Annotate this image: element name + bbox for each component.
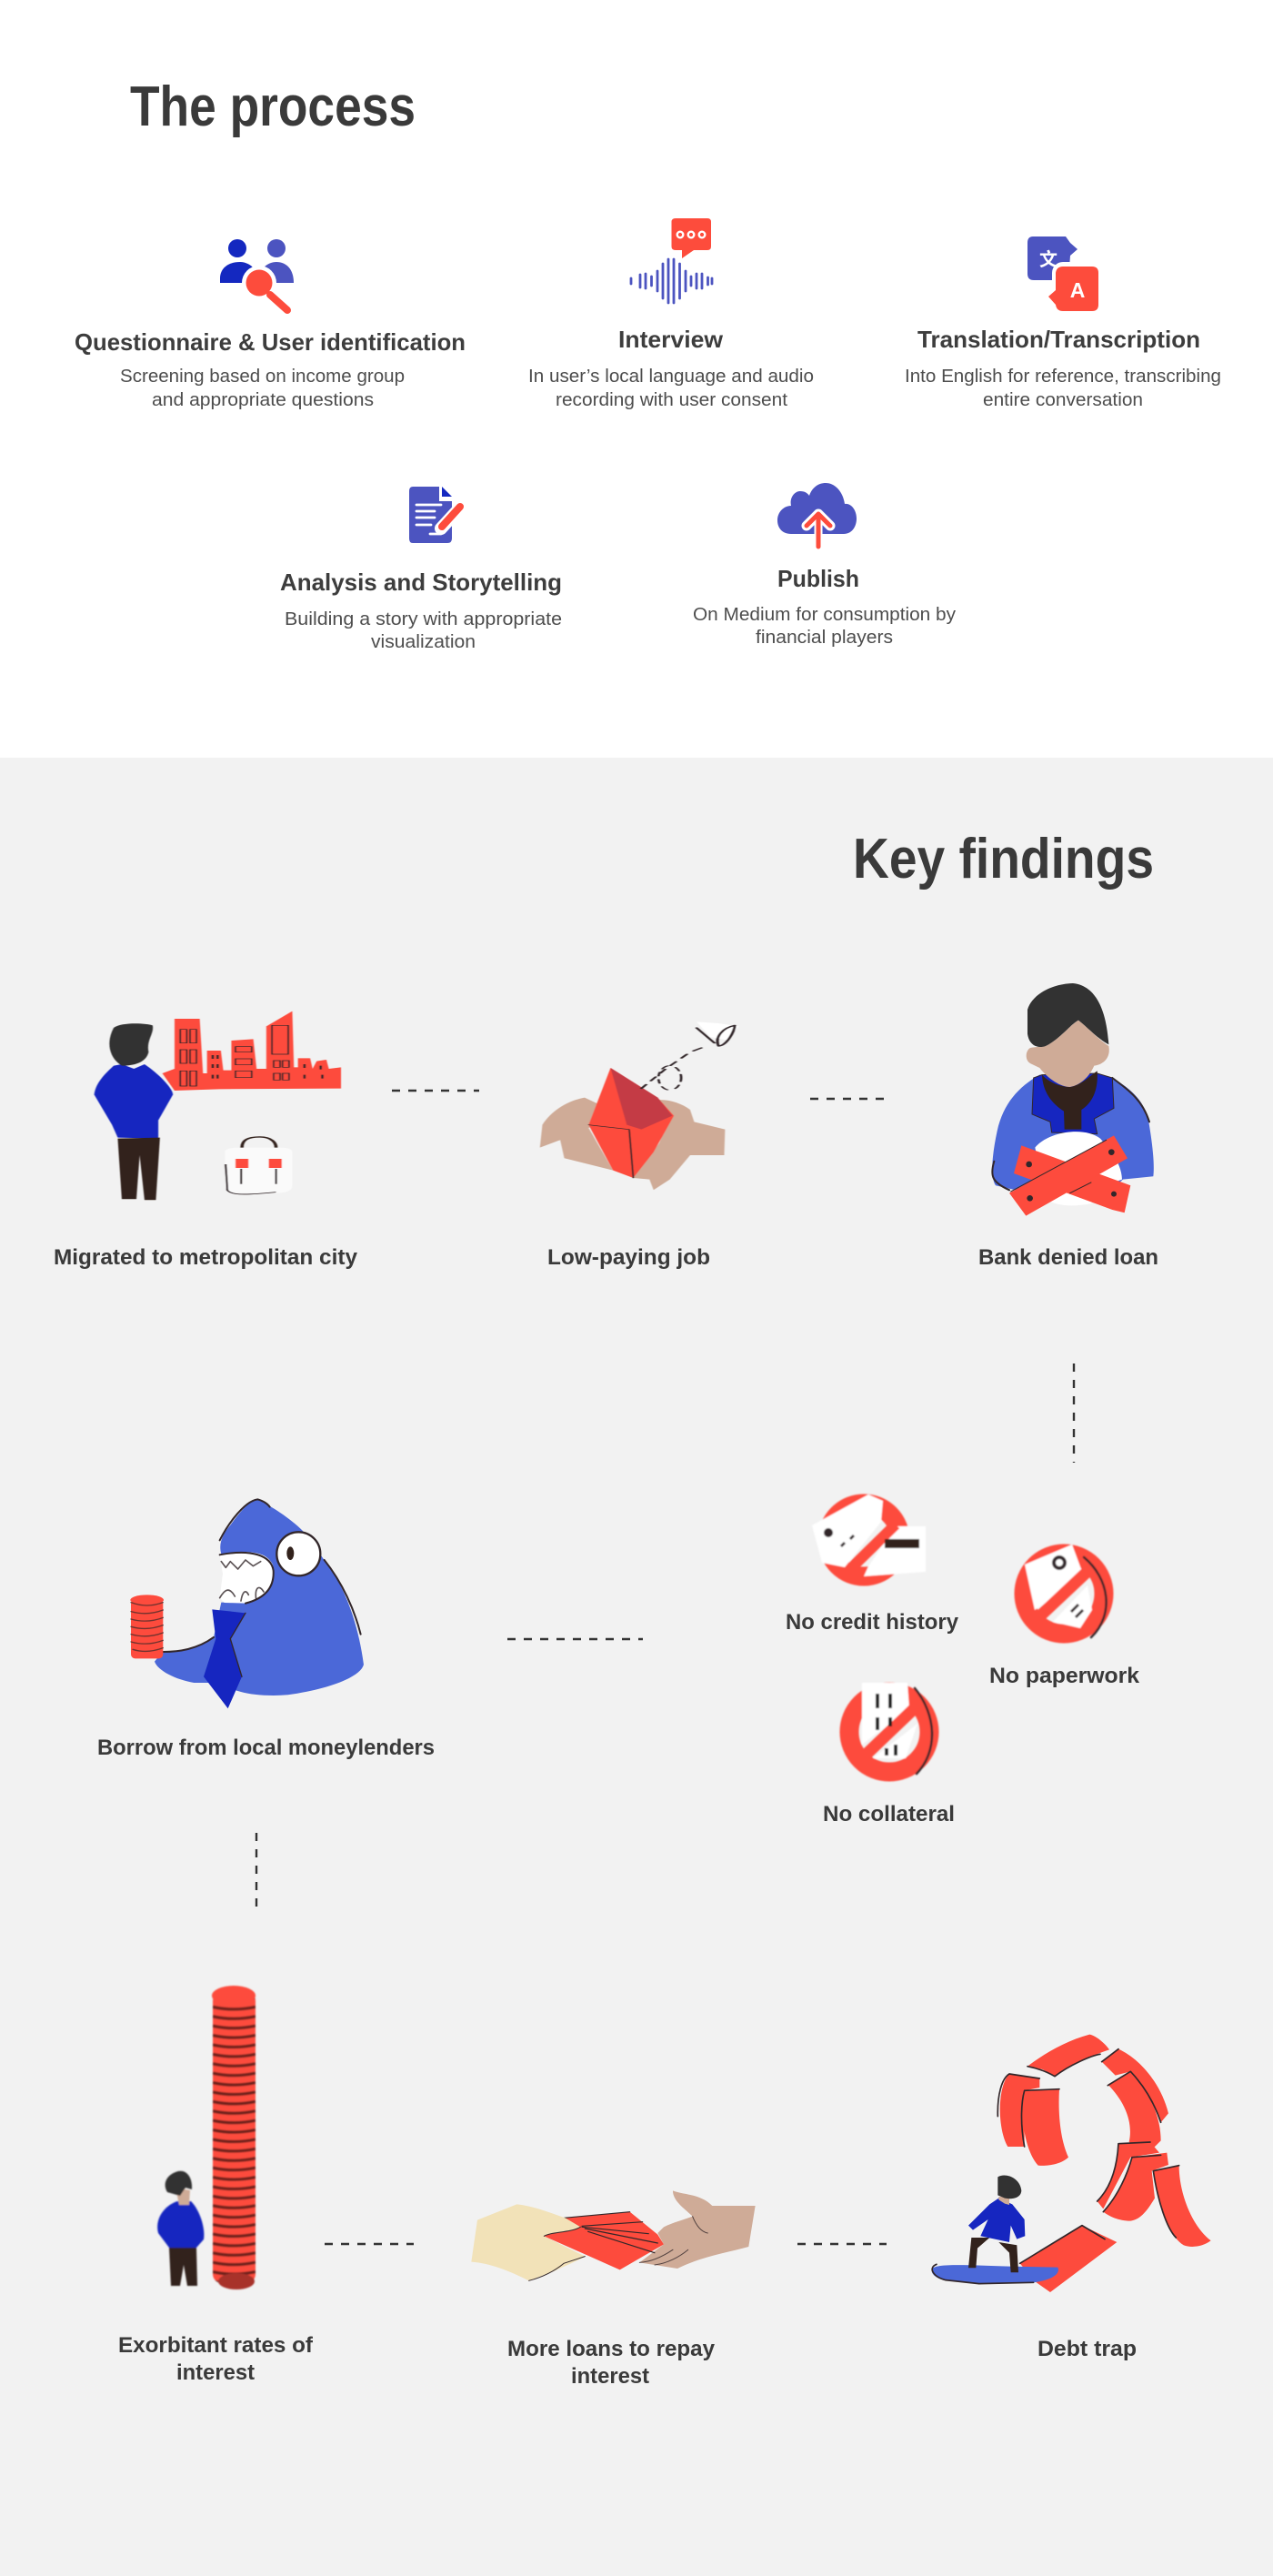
icon: speech bubble and waveform [631,218,712,303]
connector: more loans to debt trap [797,2243,887,2245]
neck [1042,1071,1098,1130]
connector: interest to more loans [325,2243,414,2245]
person [95,1023,173,1200]
heading: Translation/Transcription [917,326,1200,353]
illustration: tall coin stack and small person [157,1986,256,2289]
icon: cloud upload [777,483,857,547]
surfer [968,2175,1025,2272]
description [120,367,405,410]
icon: users with magnifier [220,239,294,310]
description: entire conversation [983,390,1143,410]
paper [588,1068,674,1178]
heading: Interview [618,326,724,353]
description: financial players [756,628,893,648]
left hand [540,1098,613,1171]
description [693,605,956,648]
shirt [1035,1132,1122,1205]
description: In user’s local language and audio [528,367,814,387]
label: more loans to repay interest: interest [571,2364,649,2389]
label: more loans to repay interest [507,2337,716,2389]
icon: translation bubbles: 文 [1039,248,1057,270]
right hand [639,2190,756,2269]
description: and appropriate questions [152,390,374,410]
title: the process: The process [130,75,416,138]
description: recording with user consent [556,390,787,410]
label: debt trap: Debt trap [1037,2337,1137,2361]
label: no paperwork: No paperwork [989,1664,1140,1688]
face [1027,1021,1109,1087]
description: On Medium for consumption by [693,605,956,625]
person [157,2171,204,2286]
label: no credit history: No credit history [786,1610,959,1635]
illustration: bank denied man with crossed planks [992,983,1154,1216]
crossed planks [1009,1135,1130,1216]
connector: reasons to moneylender [507,1638,643,1640]
label: no collateral: No collateral [823,1802,955,1826]
connector: bank to reasons [1073,1363,1075,1463]
label: low-paying job: Low-paying job [547,1245,710,1270]
jacket [992,1075,1154,1192]
illustration: no collateral icon [849,1683,932,1774]
panel: key findings [0,758,1273,2576]
label: more loans to repay interest: More loans to repay [507,2337,716,2361]
step: publish [693,483,956,648]
coin stack [212,1986,256,2289]
right hand [633,1100,725,1190]
label: borrow from local moneylenders: Borrow from local moneylenders [97,1736,435,1760]
skyline [163,1011,341,1091]
heading: Analysis and Storytelling [280,569,562,596]
title: key findings: Key findings [853,828,1154,891]
description: Screening based on income group [120,367,405,387]
description [905,367,1221,410]
illustration: migrant looking at city [95,1011,341,1200]
illustration: no paperwork icon [1024,1545,1107,1637]
bag [225,1137,292,1194]
label: exorbitant rates of interest: Exorbitant rates of [118,2333,314,2358]
label: bank denied loan: Bank denied loan [978,1245,1158,1270]
money [544,2212,664,2269]
step: questionnaire and user identification [75,239,466,410]
description [528,367,814,410]
surfboard [932,2265,1058,2284]
mouth [220,1553,274,1604]
collar [1032,1073,1114,1134]
label: migrated: Migrated to metropolitan city [54,1245,358,1270]
dashed cut line and scissors [641,1021,739,1090]
heading: Publish [777,565,859,592]
connector: migrated to low-paying job [392,1090,479,1092]
heading: Questionnaire & User identification [75,328,466,356]
label: exorbitant rates of interest: interest [176,2360,255,2385]
coin stack [130,1595,164,1658]
illustration: hands cutting paper low-paying job [540,1021,739,1190]
step: interview [528,218,814,410]
step: translation and transcription [905,236,1221,410]
description: visualization [371,632,476,652]
icon: translation bubbles: A [1070,278,1085,302]
description: Building a story with appropriate [285,609,562,629]
tie [204,1609,246,1708]
illustration: no credit history icon [812,1494,926,1576]
panel: the process [0,0,1273,758]
label: exorbitant rates of interest [118,2333,314,2385]
eye [276,1532,320,1575]
illustration: surfer in debt trap wave [932,2035,1211,2292]
icon: translation bubbles [1027,236,1103,315]
description: Into English for reference, transcribing [905,367,1221,387]
debt wave segments [1000,2035,1211,2292]
shark body [155,1499,364,1696]
illustration: shark moneylender [130,1499,364,1708]
icon: document with pencil [409,487,461,543]
connector: low-paying job to bank [810,1098,891,1100]
left hand [471,2204,585,2280]
hair [1027,983,1108,1047]
step: analysis and storytelling [280,487,562,652]
description [285,609,562,652]
connector: moneylender to interest [256,1833,257,1914]
illustration: hands exchanging money [471,2190,756,2280]
